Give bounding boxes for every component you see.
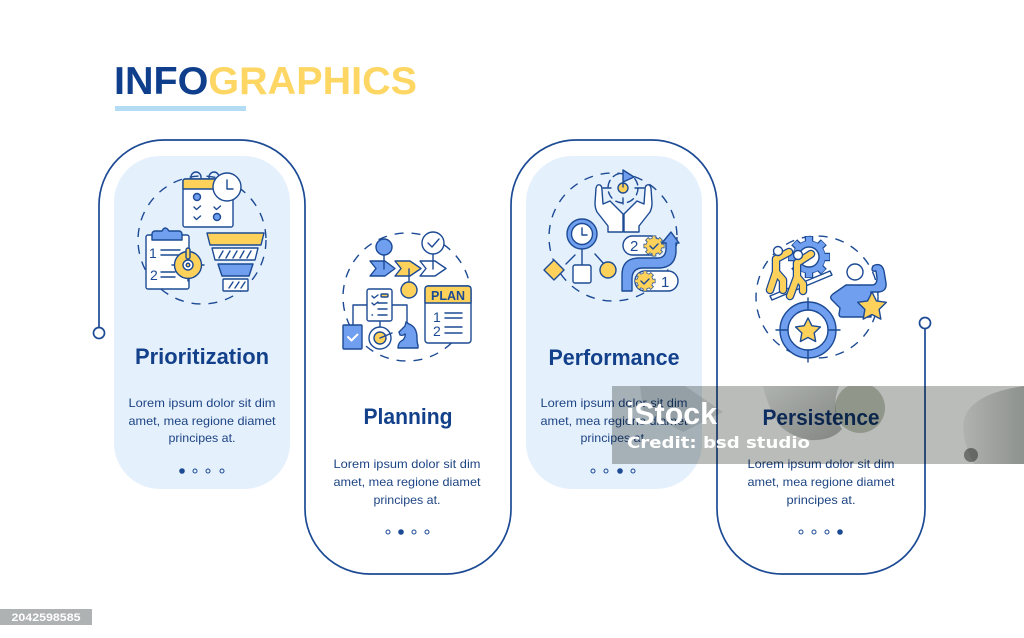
text block: planning: principes at. — [374, 493, 440, 507]
heading: performance: Performance — [548, 345, 680, 370]
panel: performance — [540, 170, 688, 473]
text block: prioritization: Lorem ipsum dolor sit dim — [128, 396, 276, 410]
text block: persistence: principes at. — [786, 493, 856, 507]
icon: planning: 1 — [433, 309, 441, 325]
pagination dots — [386, 530, 429, 534]
panel: light backgrounds — [114, 156, 702, 489]
text block: performance: Lorem ipsum dolor sit dim — [540, 396, 688, 410]
icon: planning — [343, 232, 471, 361]
icon: prioritization — [138, 172, 266, 304]
icon: prioritization: 2 — [150, 267, 158, 283]
title: INFOGRAPHICS — [114, 60, 417, 103]
text block: planning — [334, 457, 481, 507]
icon: planning: PLAN — [431, 289, 465, 303]
pagination dots — [591, 469, 635, 473]
pagination dots — [799, 530, 842, 534]
heading: prioritization: Prioritization — [135, 344, 269, 369]
icon: performance: 1 — [661, 274, 669, 291]
watermark band — [612, 386, 1024, 464]
pagination dots — [180, 469, 224, 473]
text block: planning: amet, mea regione diamet — [334, 475, 481, 489]
heading: planning: Planning — [364, 404, 452, 429]
watermark band: Credit: bsd studio — [627, 433, 810, 452]
text block: performance: amet, mea regione diamet — [540, 414, 688, 428]
text block: persistence — [748, 457, 895, 507]
panel: prioritization — [128, 172, 276, 473]
watermark band: iStock — [626, 396, 718, 431]
heading: persistence: Persistence — [762, 405, 880, 430]
text block: prioritization: amet, mea regione diamet — [128, 414, 276, 428]
text block: prioritization: principes at. — [168, 431, 236, 445]
text block: performance — [540, 396, 688, 445]
text block: persistence: amet, mea regione diamet — [748, 475, 895, 489]
panel: planning — [334, 232, 481, 534]
icon: performance — [544, 170, 679, 301]
text block: planning: Lorem ipsum dolor sit dim — [334, 457, 480, 471]
text block: prioritization — [128, 396, 276, 445]
text block: persistence: Lorem ipsum dolor sit dim — [748, 457, 894, 471]
panel: persistence — [748, 236, 895, 534]
icon: persistence — [756, 236, 886, 362]
icon: prioritization: 1 — [149, 245, 157, 261]
image id tag: 2042598585 — [12, 612, 80, 624]
icon: planning: 2 — [433, 323, 441, 339]
text block: performance: principes at. — [580, 431, 648, 445]
image id tag — [0, 609, 92, 625]
connecting outline — [94, 140, 930, 574]
icon: performance: 2 — [630, 238, 638, 255]
